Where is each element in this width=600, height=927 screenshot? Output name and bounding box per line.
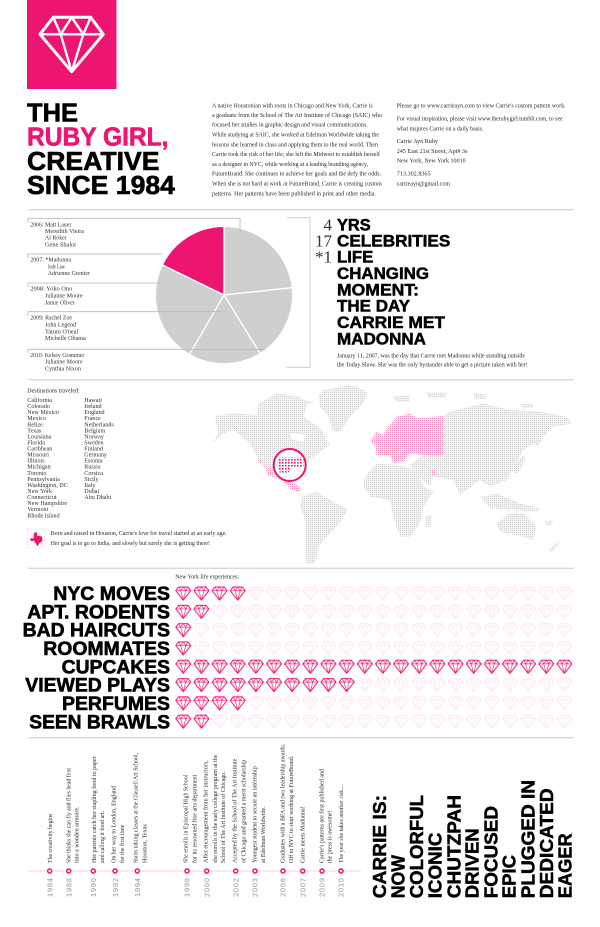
timeline events: Carrie meets Madonna! — [300, 806, 307, 863]
timeline events: at Edelman Worldwide. — [260, 806, 267, 863]
timeline events: of Chicago and granted a merit scholarship — [240, 760, 247, 863]
travel caption: Born and raised in Houston, Carrie's love for travel started at an early age. — [51, 530, 227, 537]
timeline events: into a wooden armoire. — [74, 806, 81, 863]
carrie is: rotated word list: DEDICATED — [536, 788, 557, 898]
carrie is: rotated word list: DRIVEN — [462, 828, 483, 898]
timeline events: the press is awesome! — [326, 810, 333, 863]
new york experience labels: SEEN BRAWLS — [29, 712, 170, 733]
biography text block — [212, 102, 382, 197]
destinations list: Belgium — [84, 428, 106, 434]
contact text block: carrieayn@gmail.com — [397, 181, 450, 188]
carrie is: rotated word list: EAGER — [555, 833, 576, 898]
contact text block: 245 East 21st Street, Apt# 3e — [397, 148, 468, 155]
destinations list: Germany — [84, 453, 108, 459]
carrie is: rotated word list: CARRIE IS: — [369, 795, 390, 898]
celebrity lists by year: Julianne Moore — [45, 360, 83, 366]
destinations list: Netherlands — [84, 422, 114, 428]
timeline events: On her way to London, England — [110, 785, 117, 863]
timeline events: Carrie's patterns are first published and — [319, 768, 326, 863]
celebrity lists by year: Gene Shalot — [45, 242, 76, 248]
timeline years: 2002 — [232, 878, 240, 897]
timeline events: she enrolls in the early college program at the — [212, 755, 219, 863]
biography text block: When she is not hard at work at FutureBrand, Carrie is creating custom — [212, 181, 382, 188]
destinations list: Italy — [84, 483, 96, 489]
biography text block: A native Houstonian with roots in Chicago and New York, Carrie is — [212, 102, 373, 109]
destinations list: Corsica — [84, 471, 103, 477]
destinations list: Destinations traveled: — [27, 388, 80, 395]
contact text block: Please go to www.carrieayn.com to view Carrie's custom pattern work. — [397, 102, 566, 109]
dotted world map — [212, 385, 572, 564]
destinations list: Dubai — [84, 489, 99, 495]
destinations list: Ireland — [84, 404, 102, 410]
carrie is: rotated word list: ICONIC — [425, 833, 446, 898]
timeline years: 2010 — [337, 878, 346, 897]
carrie is: rotated word list: NOW — [387, 855, 408, 898]
icon: texas with dashed box — [28, 529, 45, 548]
destinations list: New Hampshire — [27, 501, 67, 507]
contact text block: 713.302.8365 — [397, 170, 431, 177]
timeline events: for the first time — [119, 825, 126, 863]
timeline events: The year she takes another risk... — [338, 785, 345, 863]
destinations list — [27, 388, 114, 519]
destinations list: Colorado — [27, 404, 50, 410]
title — [27, 100, 176, 200]
destinations list: Vermont — [27, 507, 49, 513]
heading: 4 yrs 17 celebrities 1 life changing moment — [337, 215, 450, 348]
timeline years: 2003 — [251, 878, 260, 897]
biography text block: FutureBrand. She continues to achieve her goals and the defy the odds. — [212, 171, 381, 178]
celebrity lists by year: 2007: *Madonna — [30, 257, 71, 263]
madonna story caption: January 11, 2007, was the day that Carrie met Madonna while standing outside — [337, 352, 525, 359]
destinations list: Mexico — [27, 416, 46, 422]
carrie is: rotated word list: EPIC — [499, 855, 520, 898]
right bracket beside pie — [287, 218, 310, 367]
title: THE — [27, 100, 78, 128]
new york experience labels: NYC MOVES — [53, 584, 170, 605]
biography text block: a graduate from the School of The Art Institute of Chicago (SAIC) who — [212, 112, 382, 119]
label: new york life experiences: New York life experiences: — [175, 574, 239, 581]
destinations list: Florida — [27, 440, 45, 446]
celebrity lists by year: John Legend — [45, 323, 76, 329]
stat numbers — [315, 215, 332, 267]
timeline years: 1994 — [133, 878, 142, 897]
title: CREATIVE — [27, 148, 160, 176]
timeline events: Accepted by the School of The Art Institute — [232, 759, 239, 863]
destinations list: Texas — [27, 428, 42, 434]
celebrity lists by year: Jude Law — [48, 264, 65, 270]
new york experience labels: VIEWED PLAYS — [25, 676, 170, 697]
destinations list: Washington, DC — [27, 483, 68, 489]
timeline events: After encouragement from her instructors, — [202, 760, 209, 863]
celebrity lists by year: 2009: Rachel Zoe — [30, 316, 72, 322]
timeline events: Starts taking classes at the Glassell Art School, — [133, 753, 140, 863]
timeline events: The creativity begins — [47, 813, 54, 863]
celebrity lists by year: Al Roker — [45, 236, 67, 242]
new york experience labels: ROOMMATES — [43, 639, 170, 660]
celebrity lists by year: Tatum O'neal — [45, 329, 79, 335]
destinations list: Belize — [27, 422, 43, 428]
destinations list: Connecticut — [27, 495, 57, 501]
timeline events: Off to NYC to start working at FutureBrand. — [288, 755, 295, 863]
carrie is: rotated word list: CHUTZPAH — [443, 795, 464, 898]
biography text block: patterns. Her patterns have been published in print and other media. — [212, 190, 376, 197]
destinations list: New Mexico — [27, 410, 59, 416]
new york experience labels — [23, 584, 170, 733]
timeline events: She enrolls in Episcopal High School — [182, 774, 189, 863]
heading: 4 yrs 17 celebrities 1 life changing moment: CELEBRITIES — [337, 231, 450, 250]
stat numbers: 17 — [315, 231, 332, 250]
biography text block: Carrie took the risk of her life; she left the Midwest to establish herself — [212, 151, 381, 158]
celebrity lists by year: 2010: Kelsey Grammer — [30, 353, 84, 359]
biography text block: focused her studies in graphic design and visual communications. — [212, 122, 368, 129]
logo: pink square with diamond — [27, 0, 116, 89]
celebrity lists by year — [30, 222, 90, 372]
destinations list: Missouri — [27, 453, 49, 459]
destinations list: England — [84, 410, 105, 416]
destinations list: Caribbean — [27, 446, 52, 452]
celebrity lists by year: Meredith Vieira — [45, 229, 84, 235]
timeline events: School of The Art Institute of Chicago. — [220, 771, 227, 863]
timeline years: 1988 — [64, 878, 74, 897]
heading: 4 yrs 17 celebrities 1 life changing moment: CHANGING — [337, 264, 429, 283]
new york experience labels: CUPCAKES — [62, 657, 170, 678]
destinations list: Sweden — [84, 440, 104, 446]
timeline years: 1992 — [111, 878, 120, 897]
new york experience labels: BAD HAIRCUTS — [23, 621, 170, 642]
stat numbers: *1 — [315, 248, 332, 267]
timeline years: 2007 — [298, 878, 308, 897]
contact text block: For visual inspiration, please visit www.therubygirl.tumblr.com, to see — [397, 116, 563, 123]
heading: 4 yrs 17 celebrities 1 life changing moment: CARRIE MET — [337, 313, 446, 332]
carrie is: rotated word list: PLUGGED IN — [517, 780, 538, 898]
madonna story caption: the Today Show. She was the only bystander able to get a picture taken with her! — [337, 362, 528, 369]
destinations list: Norway — [84, 434, 105, 440]
timeline events: Youngest student to secure an internship — [252, 766, 259, 863]
destinations list: Estonia — [84, 459, 103, 465]
destinations list: Toronto — [27, 471, 47, 477]
heading: 4 yrs 17 celebrities 1 life changing moment: MOMENT: — [337, 280, 419, 299]
destinations list: Louisiana — [27, 434, 52, 440]
madonna story caption — [337, 352, 528, 369]
destinations list: Rhode Island — [27, 513, 60, 519]
timeline events — [47, 743, 345, 863]
destinations list: Finland — [84, 446, 103, 452]
destinations list: Abu Dhabi — [84, 495, 112, 501]
celebrity lists by year: 2006: Matt Lauer — [30, 222, 71, 228]
timeline events: Houston, Texas — [142, 823, 149, 863]
celebrity lists by year: Adrienne Grenier — [48, 271, 90, 277]
contact text block: what inspires Carrie on a daily basis. — [397, 125, 484, 132]
new york experience labels: PERFUMES — [62, 694, 170, 715]
timeline events: for its renowned fine arts department — [191, 774, 198, 863]
heading: 4 yrs 17 celebrities 1 life changing moment: YRS — [337, 215, 371, 234]
timeline events: and calling it food art. — [99, 810, 106, 863]
travel caption: Her goal is to go to India, and slowly but surely she is getting there! — [51, 540, 210, 547]
celebrity lists by year: Julianne Moore — [45, 294, 83, 300]
destinations list: New York — [27, 489, 53, 495]
destinations list: Russia — [84, 465, 101, 471]
title: RUBY GIRL, — [27, 124, 168, 152]
destinations list: Hawaii — [84, 398, 102, 404]
destinations list: Illinois — [27, 459, 45, 465]
contact text block: Carrie Ayn Ruby — [397, 138, 439, 145]
stat numbers: 4 — [324, 215, 332, 234]
new york experience labels: APT. RODENTS — [27, 602, 170, 623]
diamond pictogram chart — [174, 584, 573, 731]
celebrity lists by year: Jamie Oliver — [45, 300, 75, 306]
carrie is: rotated word list: COLORFUL — [406, 795, 427, 898]
timeline events: Her parents catch her stapling food to paper — [91, 755, 98, 863]
leader lines from celebrity lists to pie — [28, 218, 265, 353]
timeline events: She thinks she can fly and flies head first — [66, 768, 73, 863]
map highlight circle: usa — [270, 449, 310, 481]
carrie is: rotated word list: FOCUSED — [480, 806, 501, 898]
timeline axis with year markers — [27, 869, 361, 873]
timeline years — [46, 878, 346, 897]
pie chart: celebrities per year — [155, 226, 293, 364]
timeline years: 1984 — [46, 878, 54, 897]
biography text block: lessons she learned in class and applying them to the real world. Then — [212, 141, 379, 148]
timeline events: Graduates with a BFA and two leadership awards. — [279, 743, 286, 863]
destinations list: California — [27, 397, 52, 404]
biography text block: as a designer in NYC, while working at a leading branding agency, — [212, 161, 368, 168]
destinations list: Sicily — [84, 477, 99, 483]
destinations list: Michigan — [27, 465, 51, 471]
timeline years: 1990 — [89, 878, 98, 897]
travel caption — [51, 530, 227, 547]
timeline years: 2000 — [202, 878, 212, 897]
biography text block: While studying at SAIC, she worked at Edelman Worldwide taking the — [212, 132, 379, 139]
heading: 4 yrs 17 celebrities 1 life changing moment: LIFE — [337, 248, 373, 267]
contact text block — [397, 102, 566, 188]
contact text block: New York, New York 10010 — [397, 158, 466, 165]
celebrity lists by year: 2008: Yoko Ono — [30, 287, 72, 293]
destinations list: France — [84, 416, 101, 422]
title: SINCE 1984 — [27, 172, 176, 200]
heading: 4 yrs 17 celebrities 1 life changing moment: THE DAY — [337, 297, 410, 316]
heading: 4 yrs 17 celebrities 1 life changing moment: MADONNA — [337, 329, 426, 348]
destinations list: Pennsylvania — [27, 477, 60, 483]
timeline years: 2006 — [279, 878, 288, 897]
timeline years: 1998 — [183, 878, 192, 897]
celebrity lists by year: Michelle Obama — [45, 336, 86, 342]
celebrity lists by year: Cynthia Nixon — [45, 366, 81, 372]
carrie is: rotated word list — [369, 780, 576, 898]
timeline years: 2009 — [318, 878, 327, 897]
